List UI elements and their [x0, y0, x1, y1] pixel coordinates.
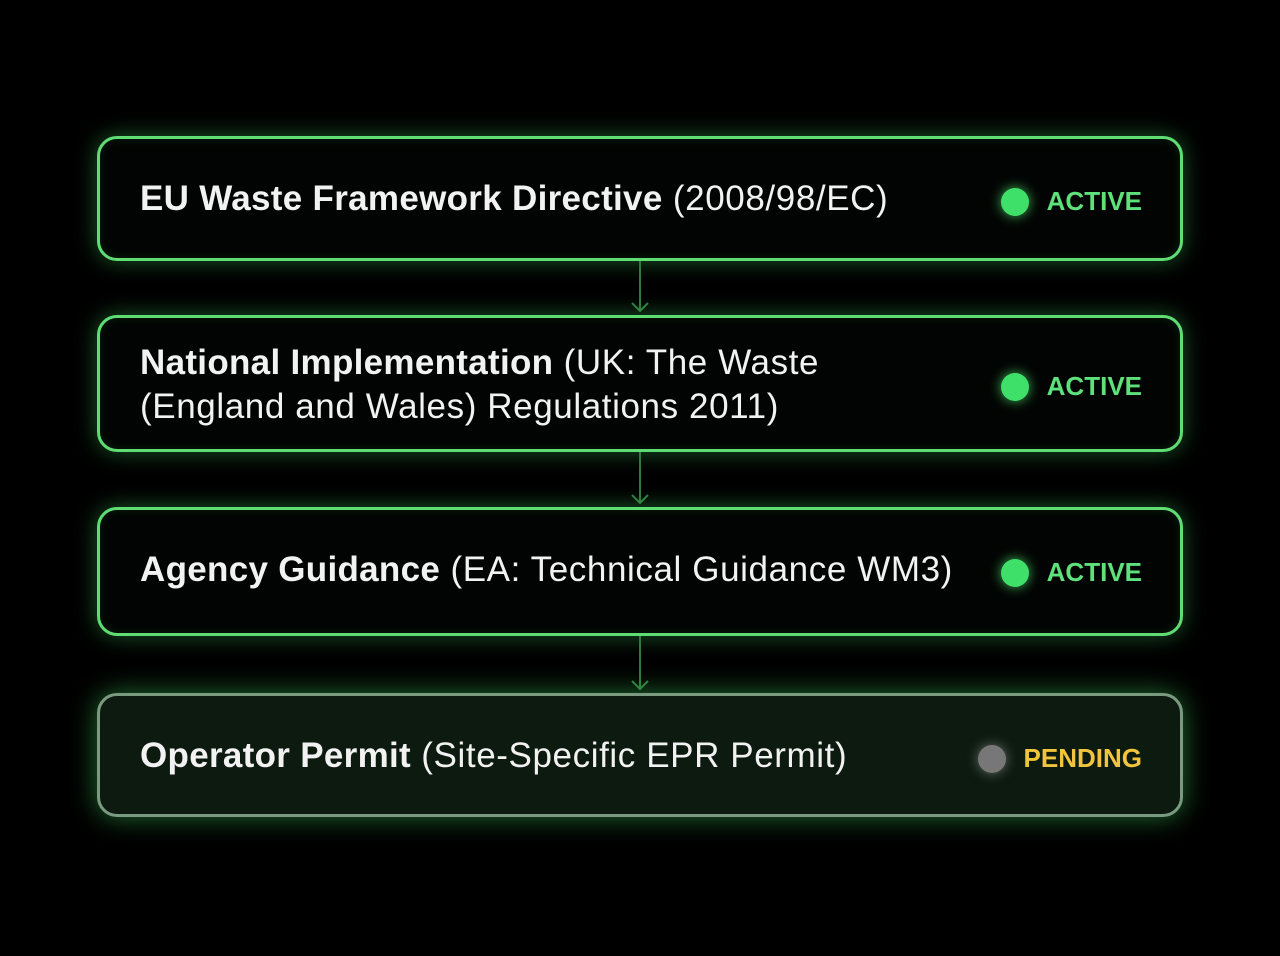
arrow 3 — [631, 636, 649, 690]
status: active: ACTIVE — [1047, 557, 1142, 587]
status: active — [992, 180, 1142, 224]
text: operator permit: Operator Permit (Site-Specific EPR Permit) — [140, 736, 847, 775]
text: national implementation — [140, 343, 819, 426]
status: pending: PENDING — [1024, 743, 1142, 773]
box: operator permit — [97, 693, 1183, 817]
status: active: ACTIVE — [1047, 371, 1142, 401]
text: national implementation: National Implementation (UK: The Waste — [140, 343, 819, 382]
status: active — [992, 364, 1142, 410]
box: agency guidance — [97, 507, 1183, 636]
text: EU directive: EU Waste Framework Directive (2008/98/EC) — [140, 179, 888, 218]
status: active: ACTIVE — [1047, 186, 1142, 216]
text: agency guidance: Agency Guidance (EA: Technical Guidance WM3) — [140, 550, 953, 589]
status: active — [992, 550, 1142, 596]
box: national implementation — [97, 315, 1183, 452]
arrow 1 — [631, 261, 649, 312]
status: pending — [972, 738, 1142, 780]
text: national implementation: (England and Wales) Regulations 2011) — [140, 387, 779, 426]
arrow 2 — [631, 452, 649, 504]
box: EU directive — [97, 136, 1183, 261]
